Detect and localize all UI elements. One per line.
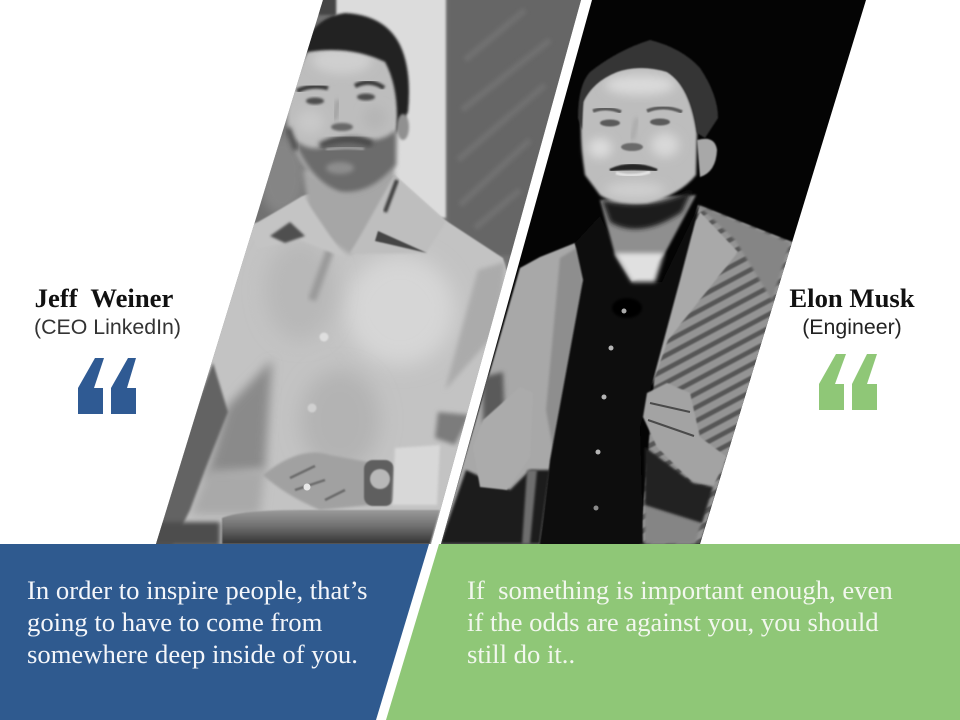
name: Jeff Weiner: Jeff Weiner (35, 283, 174, 313)
panel: blue quote (0, 544, 429, 720)
quote text: Jeff Weiner: going to have to come from (27, 607, 323, 637)
quote text: Jeff Weiner: somewhere deep inside of you. (27, 639, 358, 669)
quote text: Elon Musk: if the odds are against you, you should (467, 607, 879, 637)
black background (430, 0, 870, 544)
icon: green quote mark (819, 354, 877, 410)
photo: Jeff Weiner (140, 0, 600, 550)
role: CEO LinkedIn: (CEO LinkedIn) (34, 315, 181, 339)
hands (473, 383, 727, 523)
role: Engineer: (Engineer) (802, 315, 902, 339)
black shirt (540, 203, 700, 544)
jacket right (640, 205, 795, 544)
icon: blue quote mark (78, 358, 136, 414)
photo background (150, 0, 600, 544)
neck and collar (270, 168, 427, 255)
shirt (150, 175, 515, 544)
head (581, 66, 717, 203)
hair and ear (288, 13, 409, 150)
left sleeve (156, 363, 229, 544)
face (286, 46, 399, 193)
neck (600, 190, 696, 282)
quote text: Elon Musk: still do it.. (467, 639, 575, 669)
right cuff wrinkles (435, 412, 470, 445)
name: Elon Musk: Elon Musk (789, 283, 915, 313)
hair (578, 40, 718, 138)
quote text: Jeff Weiner: In order to inspire people, that’s (27, 575, 368, 605)
quote text: Elon Musk: If something is important enough, even (467, 575, 893, 605)
hands, watch and table (150, 445, 440, 546)
jacket left (440, 243, 588, 544)
photo: Elon Musk (430, 0, 870, 544)
